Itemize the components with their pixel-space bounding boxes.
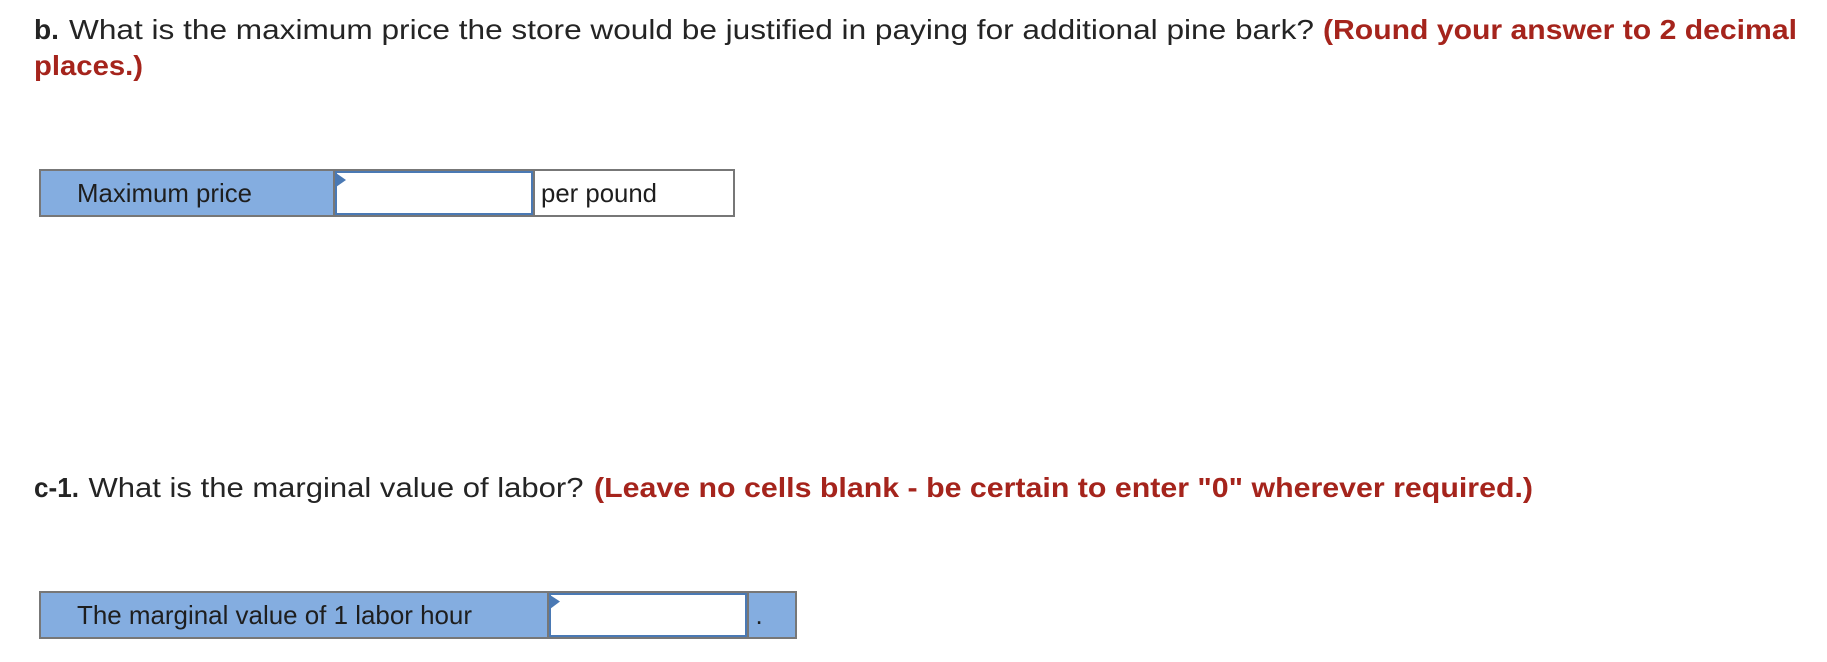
question c-1 heading bbox=[34, 472, 1533, 503]
label cell: maximum price bbox=[39, 169, 335, 217]
input cell: maximum price bbox=[333, 169, 535, 217]
question b heading: (Round your answer to 2 decimal bbox=[1323, 14, 1797, 45]
label cell: maximum price: Maximum price bbox=[77, 180, 252, 208]
trailing period cell bbox=[749, 593, 795, 637]
unit cell: per pound bbox=[533, 169, 735, 217]
question b heading bbox=[34, 14, 1797, 81]
table: marginal value of labor bbox=[39, 591, 797, 639]
question c-1 heading: What is the marginal value of labor? bbox=[88, 472, 584, 503]
label cell: marginal value bbox=[39, 591, 797, 639]
input cell: marginal value bbox=[549, 593, 747, 637]
question b heading: b. bbox=[34, 14, 59, 45]
label cell: marginal value: The marginal value of 1 labor hour bbox=[77, 602, 472, 630]
question c-1 heading: c-1. bbox=[34, 472, 79, 503]
question c-1 heading: (Leave no cells blank - be certain to enter "0" wherever required.) bbox=[594, 472, 1533, 503]
unit cell: per pound: per pound bbox=[541, 180, 657, 208]
trailing period cell: . bbox=[756, 602, 763, 630]
question b heading: places.) bbox=[34, 50, 143, 81]
table: maximum price bbox=[39, 169, 735, 217]
question b heading: What is the maximum price the store would be justified in paying for additional pine bark? bbox=[69, 14, 1314, 45]
